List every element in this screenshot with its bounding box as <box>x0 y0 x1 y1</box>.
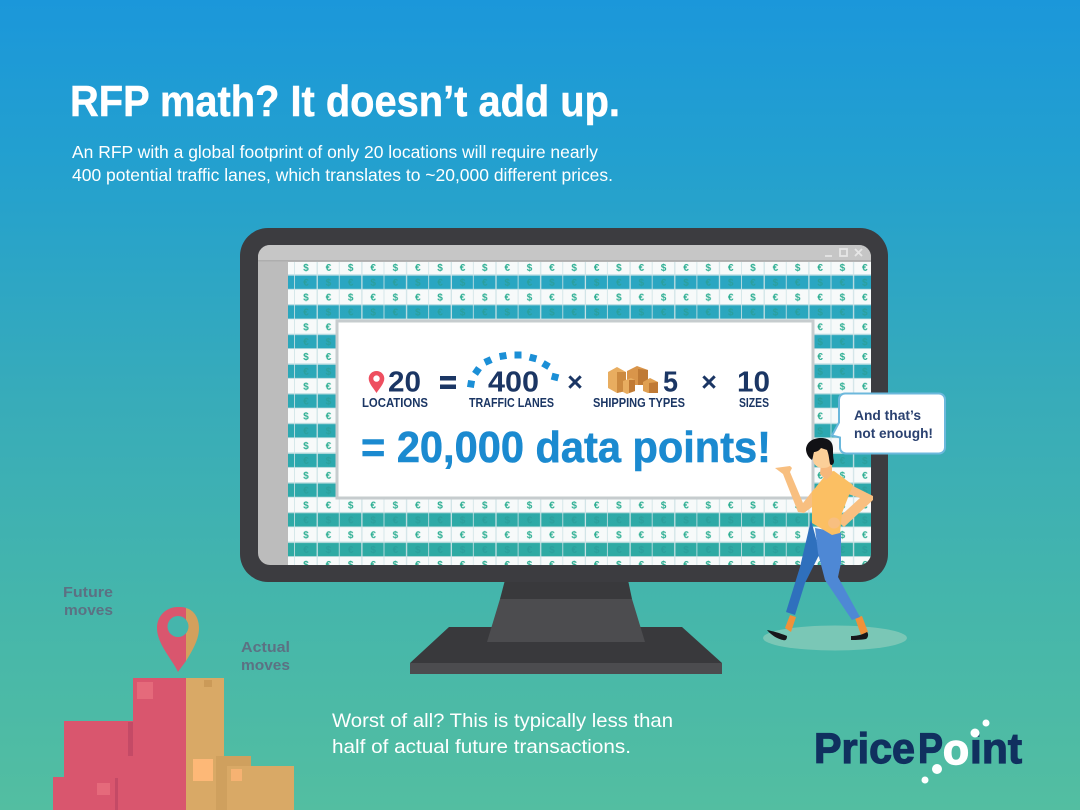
text: actual moves: moves <box>241 657 290 674</box>
back arm <box>836 485 873 527</box>
text: actual moves <box>241 639 290 674</box>
hair <box>806 438 834 465</box>
monitor <box>240 228 888 674</box>
number: 400 traffic lanes: 400 <box>488 366 539 398</box>
closing text: Worst of all? This is typically less than <box>332 710 673 732</box>
intro text: 400 potential traffic lanes, which translates to ~20,000 different prices. <box>72 165 613 185</box>
logo: PricePoint: P <box>918 725 943 773</box>
spreadsheet grid <box>288 262 871 565</box>
logo: PricePoint: o <box>943 726 969 774</box>
panel: equation <box>337 321 813 498</box>
logo: PricePoint <box>814 720 1022 784</box>
icon: lane arc <box>467 352 559 388</box>
multiply sign: × <box>567 367 583 397</box>
monitor bezel <box>240 228 888 582</box>
shirt <box>812 471 853 535</box>
shoes <box>767 630 787 640</box>
title: RFP math? It doesn’t add up. <box>70 77 620 126</box>
illustration: person walking <box>763 438 907 650</box>
logo: PricePoint: int <box>970 725 1022 773</box>
result: data points: = 20,000 data points! <box>361 423 771 472</box>
text: future moves: Future <box>63 584 113 601</box>
hand on hip <box>828 518 840 528</box>
multiply sign: × <box>701 367 717 397</box>
closing text <box>332 710 673 758</box>
callout: speech bubble: not enough! <box>854 426 933 441</box>
screen <box>258 245 871 565</box>
icon: split map pin <box>157 607 199 672</box>
text: future moves: moves <box>64 602 113 619</box>
window controls <box>825 249 862 256</box>
shadow <box>763 626 907 650</box>
number: 400 traffic lanes <box>469 366 554 410</box>
logo: PricePoint: Price <box>814 725 915 773</box>
neck and face <box>820 462 832 480</box>
icon: location pin <box>369 371 384 393</box>
number: 5 shipping types: 5 <box>663 366 678 398</box>
illustration: stacked boxes <box>53 678 294 810</box>
number: 5 shipping types <box>593 366 685 410</box>
number: 20 locations: 20 <box>388 366 421 398</box>
front arm <box>775 466 816 513</box>
number: 10 sizes: 10 <box>737 366 770 398</box>
callout: speech bubble: And that’s <box>854 408 921 423</box>
number: 20 locations <box>362 366 428 410</box>
monitor stand <box>410 580 722 674</box>
front leg <box>815 528 860 620</box>
intro text <box>72 142 613 185</box>
number: 400 traffic lanes: TRAFFIC LANES <box>469 396 554 410</box>
legs <box>785 615 796 632</box>
icon: boxes <box>608 366 658 394</box>
number: 5 shipping types: SHIPPING TYPES <box>593 396 685 410</box>
equals sign <box>440 376 456 389</box>
text: future moves <box>63 584 113 619</box>
intro text: An RFP with a global footprint of only 20 locations will require nearly <box>72 142 598 162</box>
callout: speech bubble <box>832 394 945 454</box>
number: 10 sizes: SIZES <box>739 396 769 410</box>
number: 20 locations: LOCATIONS <box>362 396 428 410</box>
back leg <box>786 520 820 615</box>
closing text: half of actual future transactions. <box>332 736 631 758</box>
text: actual moves: Actual <box>241 639 290 656</box>
